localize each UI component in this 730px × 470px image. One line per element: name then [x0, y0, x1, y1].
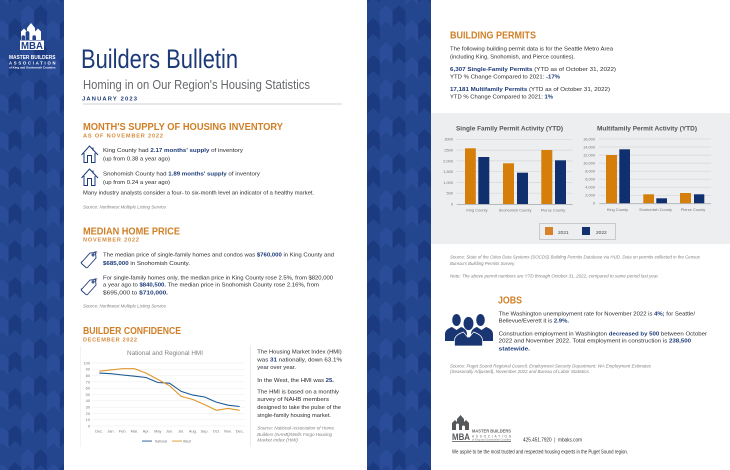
logo: footer Master Builders Association (grey): of King and Snohomish Counties: [472, 438, 512, 442]
text: multifamily permits: 17,181 Multifamily Permits (YTD as of October 31, 2022): [450, 87, 610, 93]
text: unemployment: [499, 311, 695, 325]
text: median price all homes: $685,000 in Snohomish County.: [103, 261, 190, 267]
bar chart: Single Family Permit Activity: 2,000: [443, 158, 454, 163]
text: median price single-family: $695,000 to $710,000.: [103, 291, 168, 297]
panel: month's supply of housing inventory: [82, 121, 314, 210]
panel: left chevron strip: [0, 0, 64, 470]
source: permit notes: [450, 254, 701, 278]
text: median price single-family: [103, 275, 333, 297]
line chart: National and Regional HMI: 30: [86, 404, 91, 410]
logo: Master Builders Association (white): of King and Snohomish Counties: [9, 66, 56, 70]
icon: house Snohomish County: [82, 169, 98, 186]
subheading: confidence date: DECEMBER 2022: [83, 338, 137, 344]
text: HMI explanation: designed to take the pulse of the: [257, 405, 341, 411]
source: permit notes: Note: The above permit numbers are YTD through October 31, 2022, compared to same period last year.: [450, 273, 659, 278]
bar chart: Multifamily Permit Activity: 2,000: [585, 193, 596, 198]
source: HMI: Builders (NAHB)/Wells Fargo Housing: [257, 432, 332, 437]
bar chart: Single Family Permit Activity: 500: [446, 191, 454, 196]
source: permit notes: Source: State of the Cities Data Systems (SOCDS) Building Permits Database via HUD. Data on permits collected in the Census: [450, 254, 701, 259]
logo: Master Builders Association (white): MBA: [21, 41, 43, 52]
date: JANUARY 2023: [82, 96, 138, 102]
source: median price: Source: Northwest Multiple Listing Service: [83, 303, 166, 308]
text: unemployment: Bellevue/Everett it is 2.9%.: [499, 319, 569, 325]
legend: permit years: [540, 224, 616, 240]
bar chart: Multifamily Permit Activity: 14,000: [583, 144, 596, 149]
bar chart: Multifamily Permit Activity: 16,000: [583, 136, 596, 141]
bar chart: Single Family Permit Activity: 1,500: [443, 169, 454, 174]
line chart: National and Regional HMI: Feb.: [119, 428, 127, 434]
bar chart: Single Family Permit Activity: 1,000: [443, 180, 454, 185]
text: HMI explanation: [256, 349, 342, 419]
logo: footer Master Builders Association (grey): MASTER BUILDERS: [472, 429, 511, 434]
text: HMI explanation: single-family housing market.: [257, 413, 331, 419]
text: King County supply: [103, 148, 243, 163]
logo: footer Master Builders Association (grey): [452, 415, 512, 443]
heading: jobs: JOBS: [498, 295, 522, 307]
line chart: National and Regional HMI: National: [155, 438, 167, 444]
bar chart: Single Family Permit Activity: Pierce County: [541, 208, 565, 213]
text: permit intro: (including King, Snohomish, and Pierce counties).: [450, 55, 575, 61]
line chart: National and Regional HMI: Jul.: [178, 428, 184, 434]
panel: median home price: [81, 226, 334, 308]
text: healthy market note: Many industry analysts consider a four- to six-month level an indicator of a healthy market.: [83, 191, 314, 197]
text: median price single-family: For single-family homes only, the median price in King County rose 2.5%, from $820,000: [103, 275, 333, 281]
text: HMI explanation: In the West, the HMI was 25.: [257, 378, 334, 384]
logo: Master Builders Association (white): ASSOCIATION: [9, 60, 56, 66]
text: HMI explanation: was 31 nationally, down 63.1%: [256, 358, 342, 364]
source: jobs: (Seasonally Adjusted), November 2022 and Bureau of Labor Statistics.: [450, 369, 590, 374]
heading: inventory: MONTH'S SUPPLY OF HOUSING INVENTORY: [83, 121, 283, 133]
text: single-family permits: YTD % Change Compared to 2021: -17%: [450, 75, 560, 81]
line chart: National and Regional HMI: 90: [86, 367, 91, 372]
line chart: National and Regional HMI: 10: [86, 417, 91, 422]
legend: permit years: 2022: [596, 230, 607, 236]
line chart: National and Regional HMI: 80: [86, 373, 91, 378]
line chart: National and Regional HMI: 70: [86, 379, 91, 384]
line chart: National and Regional HMI: 60: [86, 386, 91, 391]
line chart: National and Regional HMI: Aug.: [189, 428, 197, 434]
heading: builder confidence: BUILDER CONFIDENCE: [83, 325, 181, 337]
text: construction employment: Construction employment in Washington decreased by 500 between October: [499, 332, 707, 338]
source: HMI: Market Index (HMI): [257, 438, 298, 443]
bar chart: Single Family Permit Activity: King County: [466, 208, 488, 213]
panel: building permits: [450, 30, 616, 101]
line chart: National and Regional HMI: Oct.: [213, 428, 220, 434]
line chart: National and Regional HMI: [80, 345, 251, 447]
text: HMI explanation: survey of NAHB members: [257, 397, 329, 403]
line chart: National and Regional HMI: Sep.: [201, 428, 209, 434]
legend: permit years: 2021: [558, 230, 569, 236]
line chart: National and Regional HMI: Mar.: [131, 428, 138, 434]
line chart: National and Regional HMI: Nov.: [224, 428, 232, 434]
text: King County supply: King County had 2.17 months' supply of inventory: [103, 148, 243, 154]
text: construction employment: statewide.: [499, 346, 530, 352]
bar chart: Multifamily Permit Activity: Pierce County: [681, 207, 705, 212]
logo: footer Master Builders Association (grey): MBA: [452, 432, 470, 443]
bar chart: Single Family Permit Activity: 0: [451, 201, 454, 206]
bar chart: Single Family Permit Activity: Single Family Permit Activity (YTD): [456, 126, 563, 133]
line chart: National and Regional HMI: 0: [88, 423, 91, 428]
panel: jobs: [445, 295, 707, 352]
line chart: National and Regional HMI: 20: [86, 411, 91, 416]
line chart: National and Regional HMI: 40: [86, 398, 91, 403]
text: construction employment: 2022 and November 2022. Total employment in construction is 238,500: [499, 339, 691, 345]
logo: Master Builders Association (white): MASTER BUILDERS: [9, 55, 56, 61]
text: median price single-family: a year ago to $840,500. The median price in Snohomish County rose 2.16%, from: [103, 283, 319, 289]
text: median price all homes: [103, 253, 334, 267]
text: multifamily permits: YTD % Change Compared to 2021: 1%: [450, 95, 553, 101]
subtitle: Homing in on Our Region's Housing Statistics: [83, 78, 310, 92]
line chart: National and Regional HMI: Jun.: [166, 428, 173, 434]
bar chart: Multifamily Permit Activity: [583, 126, 711, 212]
logo: Master Builders Association (white): [9, 23, 56, 70]
text: unemployment: The Washington unemployment rate for November 2022 is 4%; for Seattle/: [499, 311, 695, 317]
bar chart: Multifamily Permit Activity: King County: [607, 207, 628, 212]
bar chart: Single Family Permit Activity: 2500: [444, 148, 454, 152]
panel: middle chevron strip: [367, 0, 431, 470]
text: single-family permits: [450, 67, 616, 81]
icon: three workers: [445, 314, 493, 346]
source: inventory: Source: Northwest Multiple Listing Service: [83, 205, 166, 210]
source: jobs: [450, 363, 652, 374]
line chart: National and Regional HMI: Dec.: [95, 428, 103, 434]
panel: permit charts background: [431, 113, 730, 244]
icon: price tag 1: [81, 251, 97, 268]
bar chart: Multifamily Permit Activity: Snohomish County: [639, 207, 672, 212]
source: permit notes: Bureau's Building Permits Survey.: [450, 261, 515, 266]
bar chart: Multifamily Permit Activity: 4,000: [585, 185, 596, 190]
bar chart: Single Family Permit Activity: 3000: [444, 137, 454, 142]
text: median price all homes: The median price of single-family homes and condos was $760,000 in King County and: [103, 253, 334, 259]
text: King County supply: (up from 0.38 a year ago): [103, 157, 170, 163]
icon: house King County: [82, 146, 98, 162]
line chart: National and Regional HMI: Dec.: [236, 428, 244, 434]
bar chart: Multifamily Permit Activity: 6,000: [585, 177, 596, 182]
line chart: National and Regional HMI: 50: [86, 392, 91, 397]
bar chart: Multifamily Permit Activity: 0: [593, 201, 596, 206]
icon: price tag 2: [81, 278, 97, 295]
subheading: price date: NOVEMBER 2022: [83, 237, 139, 243]
text: permit intro: The following building permit data is for the Seattle Metro Area: [450, 47, 614, 53]
heading: building permits: BUILDING PERMITS: [450, 30, 536, 42]
line chart: National and Regional HMI: 100: [84, 360, 91, 365]
text: construction employment: [499, 332, 707, 352]
line chart: National and Regional HMI: National and Regional HMI: [127, 350, 203, 357]
text: Snohomish County supply: [103, 171, 260, 186]
text: permit intro: [450, 47, 614, 61]
panel: builder confidence: [80, 325, 342, 447]
source: HMI: [257, 425, 334, 443]
line chart: National and Regional HMI: May: [154, 428, 162, 434]
text: Snohomish County supply: (up from 0.24 a year ago): [103, 180, 170, 186]
bar chart: Single Family Permit Activity: [443, 126, 573, 213]
bar chart: Multifamily Permit Activity: Multifamily Permit Activity (YTD): [597, 126, 697, 133]
source: jobs: Source: Puget Sound Regional Council, Employment Security Department: WA Employment Estimates: [450, 363, 652, 368]
logo: footer Master Builders Association (grey): ASSOCIATION: [472, 434, 512, 438]
text: HMI explanation: The HMI is based on a monthly: [257, 390, 339, 396]
text: single-family permits: 6,307 Single-Family Permits (YTD as of October 31, 2022): [450, 67, 616, 73]
source: HMI: Source: National Association of Home: [257, 425, 334, 430]
title: Builders Bulletin: [81, 44, 238, 74]
text: multifamily permits: [450, 87, 610, 101]
bar chart: Multifamily Permit Activity: 8,000: [585, 169, 596, 174]
text: Snohomish County supply: Snohomish County had 1.89 months' supply of inventory: [103, 171, 260, 177]
text: contact details: 425.451.7920 | mbaks.com: [523, 438, 582, 444]
heading: median home price: MEDIAN HOME PRICE: [83, 226, 180, 238]
text: HMI explanation: The Housing Market Index (HMI): [257, 349, 342, 355]
bar chart: Multifamily Permit Activity: 10,000: [583, 160, 596, 166]
line chart: National and Regional HMI: Jan.: [107, 428, 115, 434]
bar chart: Multifamily Permit Activity: 12,000: [583, 152, 596, 158]
line chart: National and Regional HMI: Apr.: [143, 428, 150, 434]
text: HMI explanation: year over year.: [257, 365, 296, 371]
line chart: National and Regional HMI: West: [183, 438, 192, 444]
subheading: inventory date: AS OF NOVEMBER 2022: [83, 134, 163, 140]
text: mission statement: We aspire to be the most trusted and respected housing experts in the Puget Sound region.: [452, 450, 628, 456]
bar chart: Single Family Permit Activity: Snohomish County: [499, 208, 531, 213]
